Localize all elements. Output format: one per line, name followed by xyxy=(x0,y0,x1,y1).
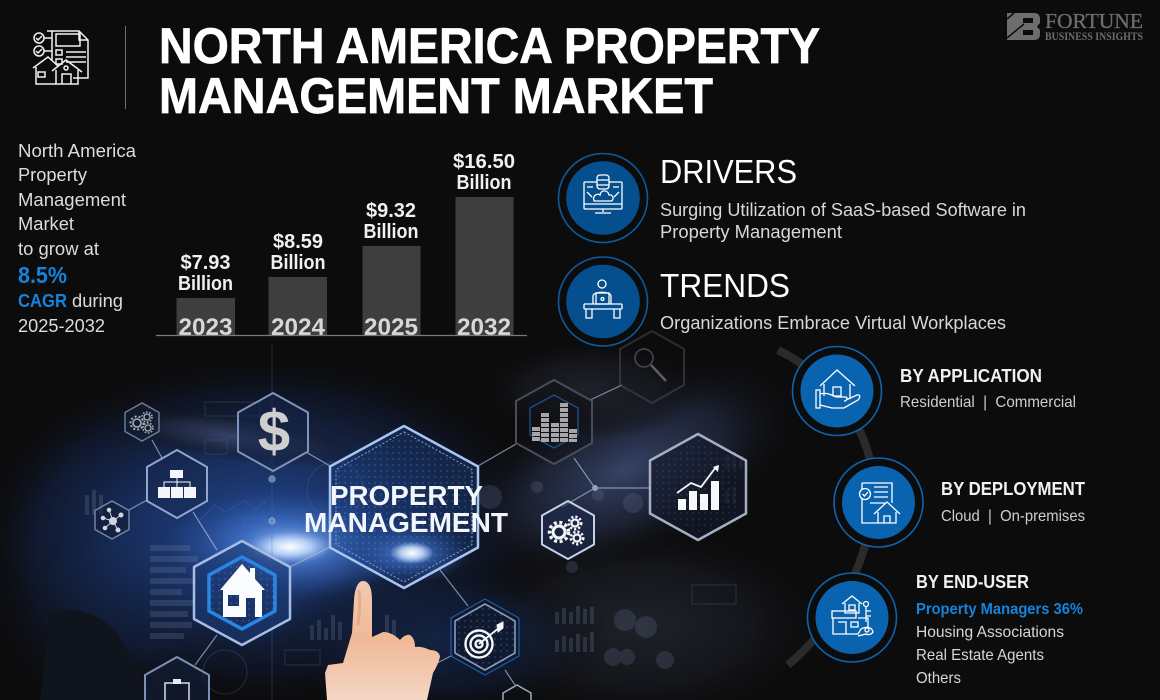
text block: CAGR summary: during xyxy=(72,290,123,311)
text block: CAGR summary: Market xyxy=(18,213,74,234)
hexagon: clipboard xyxy=(145,657,209,700)
text: drivers: Surging Utilization of SaaS-based Software in xyxy=(660,199,1026,220)
hexagon: network xyxy=(95,501,129,539)
bar: 2023: $7.93 xyxy=(180,251,230,274)
text: by end-user: Real Estate Agents xyxy=(916,647,1044,664)
text: trends xyxy=(660,267,1006,333)
heading: PROPERTY MANAGEMENT xyxy=(304,480,508,538)
person's shoulder silhouette xyxy=(40,609,152,700)
icon: by deployment document with house xyxy=(834,458,923,547)
bar chart xyxy=(156,150,527,341)
hexagon: growth chart xyxy=(650,434,746,540)
text: by end-user xyxy=(916,571,1083,687)
icon: by end-user buildings and key xyxy=(808,573,896,662)
bar: 2024: 2024 xyxy=(271,314,326,341)
text: by deployment: BY DEPLOYMENT xyxy=(941,478,1086,499)
text block: CAGR summary: CAGR xyxy=(18,290,67,311)
text: by end-user: Others xyxy=(916,670,961,687)
arc connector behind segments xyxy=(778,350,874,665)
bar: 2032: $16.50 xyxy=(453,150,515,173)
text: by application: Residential | Commercial xyxy=(900,394,1076,411)
background photo: blurred blue technology scene xyxy=(0,311,835,700)
network connector lines xyxy=(129,385,650,685)
title xyxy=(159,18,820,124)
hexagon: gears small xyxy=(125,403,159,441)
bar: 2032 xyxy=(453,150,515,341)
hexagon: house xyxy=(194,541,290,645)
hexagon: small bottom xyxy=(503,685,531,700)
hexagon: dollar xyxy=(238,393,308,471)
text: by deployment xyxy=(941,478,1086,525)
text block: CAGR summary: 8.5% xyxy=(18,262,67,288)
bar: 2032: 2032 xyxy=(457,314,511,341)
hand pointing xyxy=(325,581,440,700)
bar: 2023: Billion xyxy=(178,272,233,295)
text: by application: BY APPLICATION xyxy=(900,365,1042,386)
bar: 2024: Billion xyxy=(270,251,326,274)
text: trends: Organizations Embrace Virtual Workplaces xyxy=(660,312,1006,333)
text: by end-user: BY END-USER xyxy=(916,571,1029,592)
text: drivers: DRIVERS xyxy=(660,153,797,190)
text: by end-user: Housing Associations xyxy=(916,624,1064,641)
text block: CAGR summary: Property xyxy=(18,164,88,185)
logo: Fortune Business Insights xyxy=(1007,9,1143,43)
bar: 2025: 2025 xyxy=(364,314,418,341)
hexagon: magnifier xyxy=(620,331,684,403)
hexagon: target xyxy=(451,599,519,675)
bar: 2025: Billion xyxy=(364,220,418,243)
icon: property checklist xyxy=(33,31,88,84)
hexagon: gears xyxy=(542,501,594,559)
text: by end-user: Property Managers 36% xyxy=(916,601,1083,618)
icon: drivers cloud monitor xyxy=(558,154,648,242)
bar: 2024 xyxy=(268,230,327,341)
bar: 2032: Billion xyxy=(456,171,512,194)
bar: 2024: $8.59 xyxy=(273,230,323,253)
logo: Fortune Business Insights: BUSINESS INSIGHTS xyxy=(1045,31,1143,43)
text: trends: TRENDS xyxy=(660,267,790,304)
title: NORTH AMERICA PROPERTY xyxy=(159,18,820,74)
text block: CAGR summary xyxy=(18,140,137,336)
logo: Fortune Business Insights: FORTUNE xyxy=(1045,9,1143,33)
text block: CAGR summary: Management xyxy=(18,189,126,210)
text: by deployment: Cloud | On-premises xyxy=(941,508,1085,525)
bar: 2025: $9.32 xyxy=(366,199,416,222)
icon: by application house in hand xyxy=(792,346,882,436)
hexagon: central property management xyxy=(304,426,508,588)
hexagon: dollar: $ xyxy=(258,399,290,464)
bar: 2023 xyxy=(176,251,235,341)
text block: CAGR summary: to grow at xyxy=(18,238,99,259)
text block: CAGR summary: North America xyxy=(18,140,137,161)
text: drivers xyxy=(660,153,1026,242)
hexagon: bars equalizer xyxy=(516,380,592,464)
title: MANAGEMENT MARKET xyxy=(159,68,713,124)
hexagon: org chart xyxy=(147,450,207,518)
bar: 2023: 2023 xyxy=(178,314,232,341)
text: drivers: Property Management xyxy=(660,221,842,242)
text block: CAGR summary: 2025-2032 xyxy=(18,315,105,336)
icon: trends remote worker xyxy=(558,257,648,346)
divider xyxy=(124,26,126,109)
heading: PROPERTY MANAGEMENT: PROPERTY xyxy=(330,480,483,511)
text: by application xyxy=(900,365,1076,411)
heading: PROPERTY MANAGEMENT: MANAGEMENT xyxy=(304,507,508,538)
bar: 2025 xyxy=(362,199,420,341)
